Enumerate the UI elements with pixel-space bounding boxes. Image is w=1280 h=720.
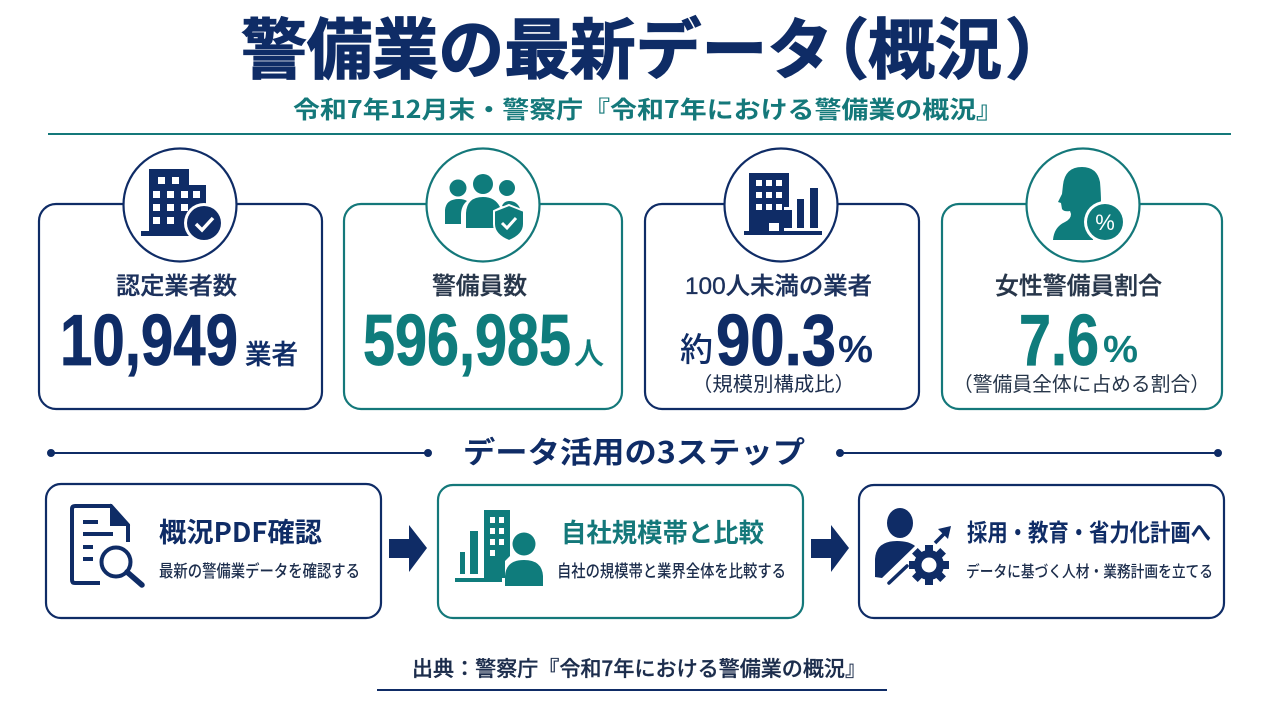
panel: 女性警備員割合 (942, 148, 1222, 409)
label: 警備員数 (432, 266, 527, 301)
value: 約 (680, 323, 713, 371)
icon: person, gear and arrow (875, 508, 951, 585)
panel: 警備員数 (344, 148, 622, 409)
value: 7.6 (1019, 301, 1099, 381)
source: 出典：警察庁『令和7年における警備業の概況』 (412, 653, 866, 683)
panel: 100人未満の業者 (645, 148, 919, 409)
step text: 自社の規模帯と業界全体を比較する (557, 557, 786, 582)
subtitle: 令和7年12月末・警察庁『令和7年における警備業の概況』 (293, 90, 1003, 125)
icon: building with check (124, 148, 236, 262)
icon: people with shield (426, 148, 540, 262)
value: 90.3 (716, 301, 836, 381)
arrow: step 2 to 3 (811, 525, 849, 572)
panel: step 2 (438, 485, 803, 618)
icon: woman with percent: % (1095, 210, 1115, 235)
label: 100人未満の業者 (685, 273, 872, 300)
panel: step 1 (46, 484, 381, 618)
icon: buildings and person (455, 510, 543, 586)
value: % (1103, 329, 1138, 371)
value: 596,985 (363, 301, 571, 381)
note: （規模別構成比） (692, 368, 855, 397)
icon: building with bars (724, 148, 838, 262)
panel: step 3 (859, 485, 1224, 618)
note: （警備員全体に占める割合） (953, 368, 1210, 397)
icon: woman with percent (1026, 148, 1140, 262)
arrow: step 1 to 2 (389, 525, 427, 572)
value: % (838, 329, 873, 371)
value: 業者 (245, 333, 298, 372)
step title: 概況PDF確認 (159, 511, 322, 550)
value: 10,949 (60, 301, 238, 381)
label: 認定業者数 (116, 266, 237, 301)
step text: 最新の警備業データを確認する (159, 557, 360, 582)
heading: steps (48, 428, 1222, 472)
label: 女性警備員割合 (995, 266, 1162, 301)
heading: steps: データ活用の3ステップ (463, 428, 805, 472)
step text: データに基づく人材・業務計画を立てる (966, 558, 1213, 582)
icon: document with magnifier (72, 506, 142, 585)
step title: 採用・教育・省力化計画へ (967, 513, 1211, 548)
value: 人 (574, 329, 604, 373)
panel: 認定業者数 (39, 148, 322, 409)
step title: 自社規模帯と比較 (561, 513, 764, 550)
